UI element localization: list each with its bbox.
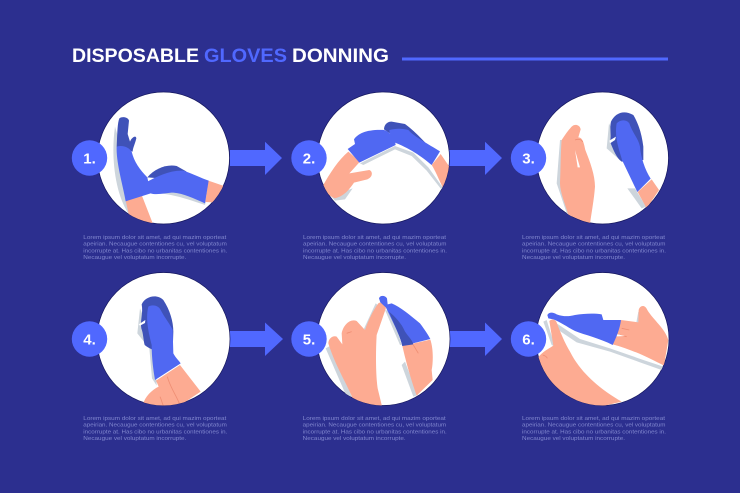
illustration: glove pulled over wrist	[137, 296, 201, 408]
arrow: step 5 to 6	[449, 322, 502, 356]
circle: step 5	[317, 272, 450, 406]
description: step 5	[303, 416, 447, 442]
illustration: glove stretched over fingers	[537, 306, 668, 408]
description: step 4: incorrupte at. Has cibo no urbanitas contentiones in.	[83, 429, 228, 435]
badge: 5: 5.	[303, 332, 315, 348]
badge: 2	[291, 140, 327, 176]
description: step 1: Lorem ipsum dolor sit amet, ad qui mazim oporteat	[83, 235, 227, 241]
circle: step 2	[318, 92, 450, 224]
panel: step 4	[72, 272, 283, 442]
arrow: step 4 to 5	[230, 322, 283, 356]
description: step 6: apeirian. Necaugue contentiones cu, vel voluptatum	[522, 423, 666, 429]
description: step 3: Lorem ipsum dolor sit amet, ad qui mazim oporteat	[522, 235, 665, 241]
illustration: hands meeting at fingertips	[323, 122, 452, 201]
description: step 4: Necaugue vel voluptatum incorrupte.	[83, 436, 187, 442]
description: step 3: apeirian. Necaugue contentiones cu, vel voluptatum	[522, 242, 666, 248]
title: GLOVES	[204, 45, 287, 67]
circle: step 1	[98, 92, 230, 224]
panel: step 6	[511, 272, 669, 442]
description: step 6	[522, 416, 666, 442]
badge: 4: 4.	[83, 332, 96, 348]
description: step 5: incorrupte at. Has cibo no urbanitas contentiones in.	[303, 429, 447, 435]
badge: 5	[291, 321, 327, 357]
title	[72, 45, 389, 67]
description: step 1	[83, 235, 228, 261]
badge: 3	[511, 140, 546, 176]
title rule	[402, 58, 668, 60]
description: step 1: Necaugue vel voluptatum incorrupte.	[83, 255, 187, 261]
circle: step 6	[536, 272, 669, 406]
title: DISPOSABLE	[72, 45, 199, 67]
description: step 1: incorrupte at. Has cibo no urbanitas contentiones in.	[83, 248, 228, 254]
arrow: step 2 to 3	[449, 142, 502, 175]
description: step 3: incorrupte at. Has cibo no urbanitas contentiones in.	[522, 248, 666, 254]
description: step 6: incorrupte at. Has cibo no urbanitas contentiones in.	[522, 429, 666, 435]
description: step 4: apeirian. Necaugue contentiones cu, vel voluptatum	[83, 423, 227, 429]
description: step 2: Lorem ipsum dolor sit amet, ad qui mazim oporteat	[303, 235, 446, 241]
description: step 1: apeirian. Necaugue contentiones cu, vel voluptatum	[83, 242, 227, 248]
description: step 2: apeirian. Necaugue contentiones cu, vel voluptatum	[303, 242, 447, 248]
arrow: step 1 to 2	[230, 142, 282, 175]
illustration: bare hand and gloved hand	[557, 112, 659, 224]
badge: 6: 6.	[522, 332, 535, 348]
panel: step 3	[511, 92, 668, 261]
illustration: pulling glove by fingertip	[326, 296, 433, 408]
illustration: gloved hand pulling cuff	[113, 117, 224, 227]
badge: 4	[72, 321, 107, 357]
description: step 4	[83, 416, 228, 442]
badge: 2: 2.	[303, 150, 315, 168]
circle: step 3	[536, 92, 668, 224]
circle: step 4	[97, 272, 230, 406]
description: step 6: Lorem ipsum dolor sit amet, ad qui mazim oporteat	[522, 416, 665, 422]
badge: 1	[72, 140, 107, 176]
description: step 3	[522, 235, 666, 261]
description: step 5: Lorem ipsum dolor sit amet, ad qui mazim oporteat	[303, 416, 446, 422]
description: step 3: Necaugue vel voluptatum incorrupte.	[522, 255, 625, 261]
badge: 1: 1.	[83, 150, 96, 168]
badge: 6	[511, 321, 546, 357]
badge: 3: 3.	[522, 150, 535, 168]
description: step 2: Necaugue vel voluptatum incorrupte.	[303, 255, 406, 261]
description: step 5: apeirian. Necaugue contentiones cu, vel voluptatum	[303, 423, 446, 429]
description: step 2: incorrupte at. Has cibo no urbanitas contentiones in.	[303, 248, 447, 254]
description: step 4: Lorem ipsum dolor sit amet, ad qui mazim oporteat	[83, 416, 227, 422]
panel: step 5	[291, 272, 502, 442]
description: step 5: Necaugue vel voluptatum incorrupte.	[303, 436, 406, 442]
description: step 6: Necaugue vel voluptatum incorrupte.	[522, 436, 625, 442]
panel: step 2	[291, 92, 502, 261]
description: step 2	[303, 235, 447, 261]
panel: step 1	[72, 92, 282, 261]
title: DONNING	[292, 45, 389, 67]
